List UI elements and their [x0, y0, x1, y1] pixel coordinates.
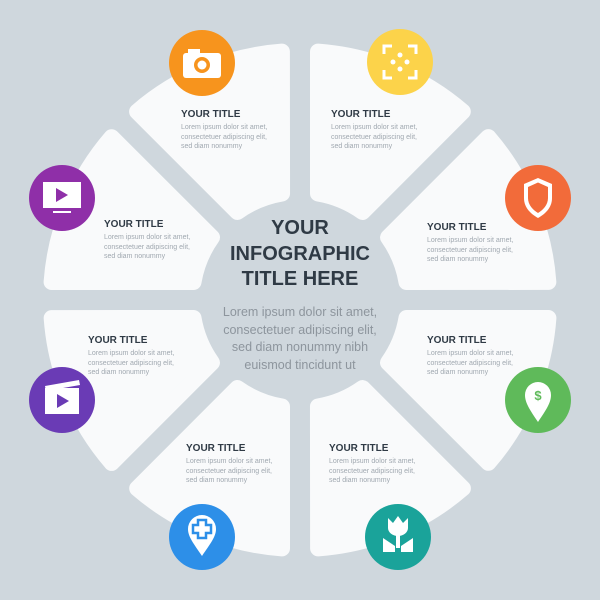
- icon: tulip: [365, 504, 431, 570]
- text: tulip sector: YOUR TITLE: [329, 443, 388, 454]
- text: film sector: YOUR TITLE: [88, 335, 147, 346]
- center title: TITLE HERE: [242, 268, 358, 290]
- text: shield sector: Lorem ipsum dolor sit amet,: [427, 237, 513, 244]
- text: money sector: YOUR TITLE: [427, 335, 486, 346]
- center text: consectetuer adipiscing elit,: [223, 322, 377, 336]
- text: camera sector: consectetuer adipiscing elit,: [181, 134, 267, 140]
- text: tulip sector: Lorem ipsum dolor sit amet,: [329, 458, 415, 465]
- text: focus sector: sed diam nonummy: [331, 143, 392, 150]
- center title: YOUR: [271, 217, 329, 239]
- text: camera sector: sed diam nonummy: [181, 143, 242, 150]
- icon: medical pin: [169, 504, 235, 570]
- text: focus sector: [331, 109, 417, 150]
- text: camera sector: Lorem ipsum dolor sit amet,: [181, 124, 267, 131]
- text: tulip sector: [329, 443, 415, 484]
- text: tv sector: consectetuer adipiscing elit,: [104, 244, 190, 250]
- text: money sector: sed diam nonummy: [427, 369, 488, 376]
- text: camera sector: YOUR TITLE: [181, 109, 240, 120]
- icon: money pin: $: [534, 388, 542, 403]
- center title: [230, 217, 370, 290]
- text: medical sector: consectetuer adipiscing elit,: [186, 468, 272, 474]
- icon: focus: [367, 29, 433, 95]
- text: medical sector: sed diam nonummy: [186, 477, 247, 484]
- text: money sector: Lorem ipsum dolor sit amet,: [427, 350, 513, 357]
- text: tulip sector: consectetuer adipiscing elit,: [329, 468, 415, 474]
- text: medical sector: YOUR TITLE: [186, 443, 245, 454]
- text: shield sector: sed diam nonummy: [427, 256, 488, 263]
- icon: shield: [505, 165, 571, 231]
- text: medical sector: Lorem ipsum dolor sit amet,: [186, 458, 272, 465]
- icon: camera: [169, 30, 235, 96]
- text: focus sector: Lorem ipsum dolor sit amet,: [331, 124, 417, 131]
- text: shield sector: YOUR TITLE: [427, 222, 486, 233]
- center text: Lorem ipsum dolor sit amet,: [223, 305, 377, 319]
- text: shield sector: consectetuer adipiscing elit,: [427, 246, 513, 254]
- text: focus sector: consectetuer adipiscing elit,: [331, 134, 417, 140]
- center text: sed diam nonummy nibh: [232, 340, 368, 354]
- center text: [223, 305, 377, 372]
- text: film sector: [88, 335, 174, 376]
- text: tv sector: sed diam nonummy: [104, 253, 165, 260]
- text: film sector: Lorem ipsum dolor sit amet,: [88, 350, 174, 357]
- icon: video clapper: [29, 367, 95, 433]
- text: tv sector: YOUR TITLE: [104, 219, 163, 230]
- text: film sector: consectetuer adipiscing elit,: [88, 360, 174, 366]
- text: focus sector: YOUR TITLE: [331, 109, 390, 120]
- text: camera sector: [181, 109, 267, 150]
- text: tv sector: Lorem ipsum dolor sit amet,: [104, 234, 190, 241]
- text: tv sector: [104, 219, 190, 260]
- center title: INFOGRAPHIC: [230, 242, 370, 264]
- text: medical sector: [186, 443, 272, 484]
- icon: tv: [29, 165, 95, 231]
- icon: money pin: [505, 367, 571, 433]
- text: money sector: [427, 335, 513, 376]
- text: film sector: sed diam nonummy: [88, 369, 149, 376]
- text: money sector: consectetuer adipiscing elit,: [427, 360, 513, 366]
- text: tulip sector: sed diam nonummy: [329, 477, 390, 484]
- text: shield sector: [427, 222, 513, 263]
- center text: euismod tincidunt ut: [244, 358, 356, 372]
